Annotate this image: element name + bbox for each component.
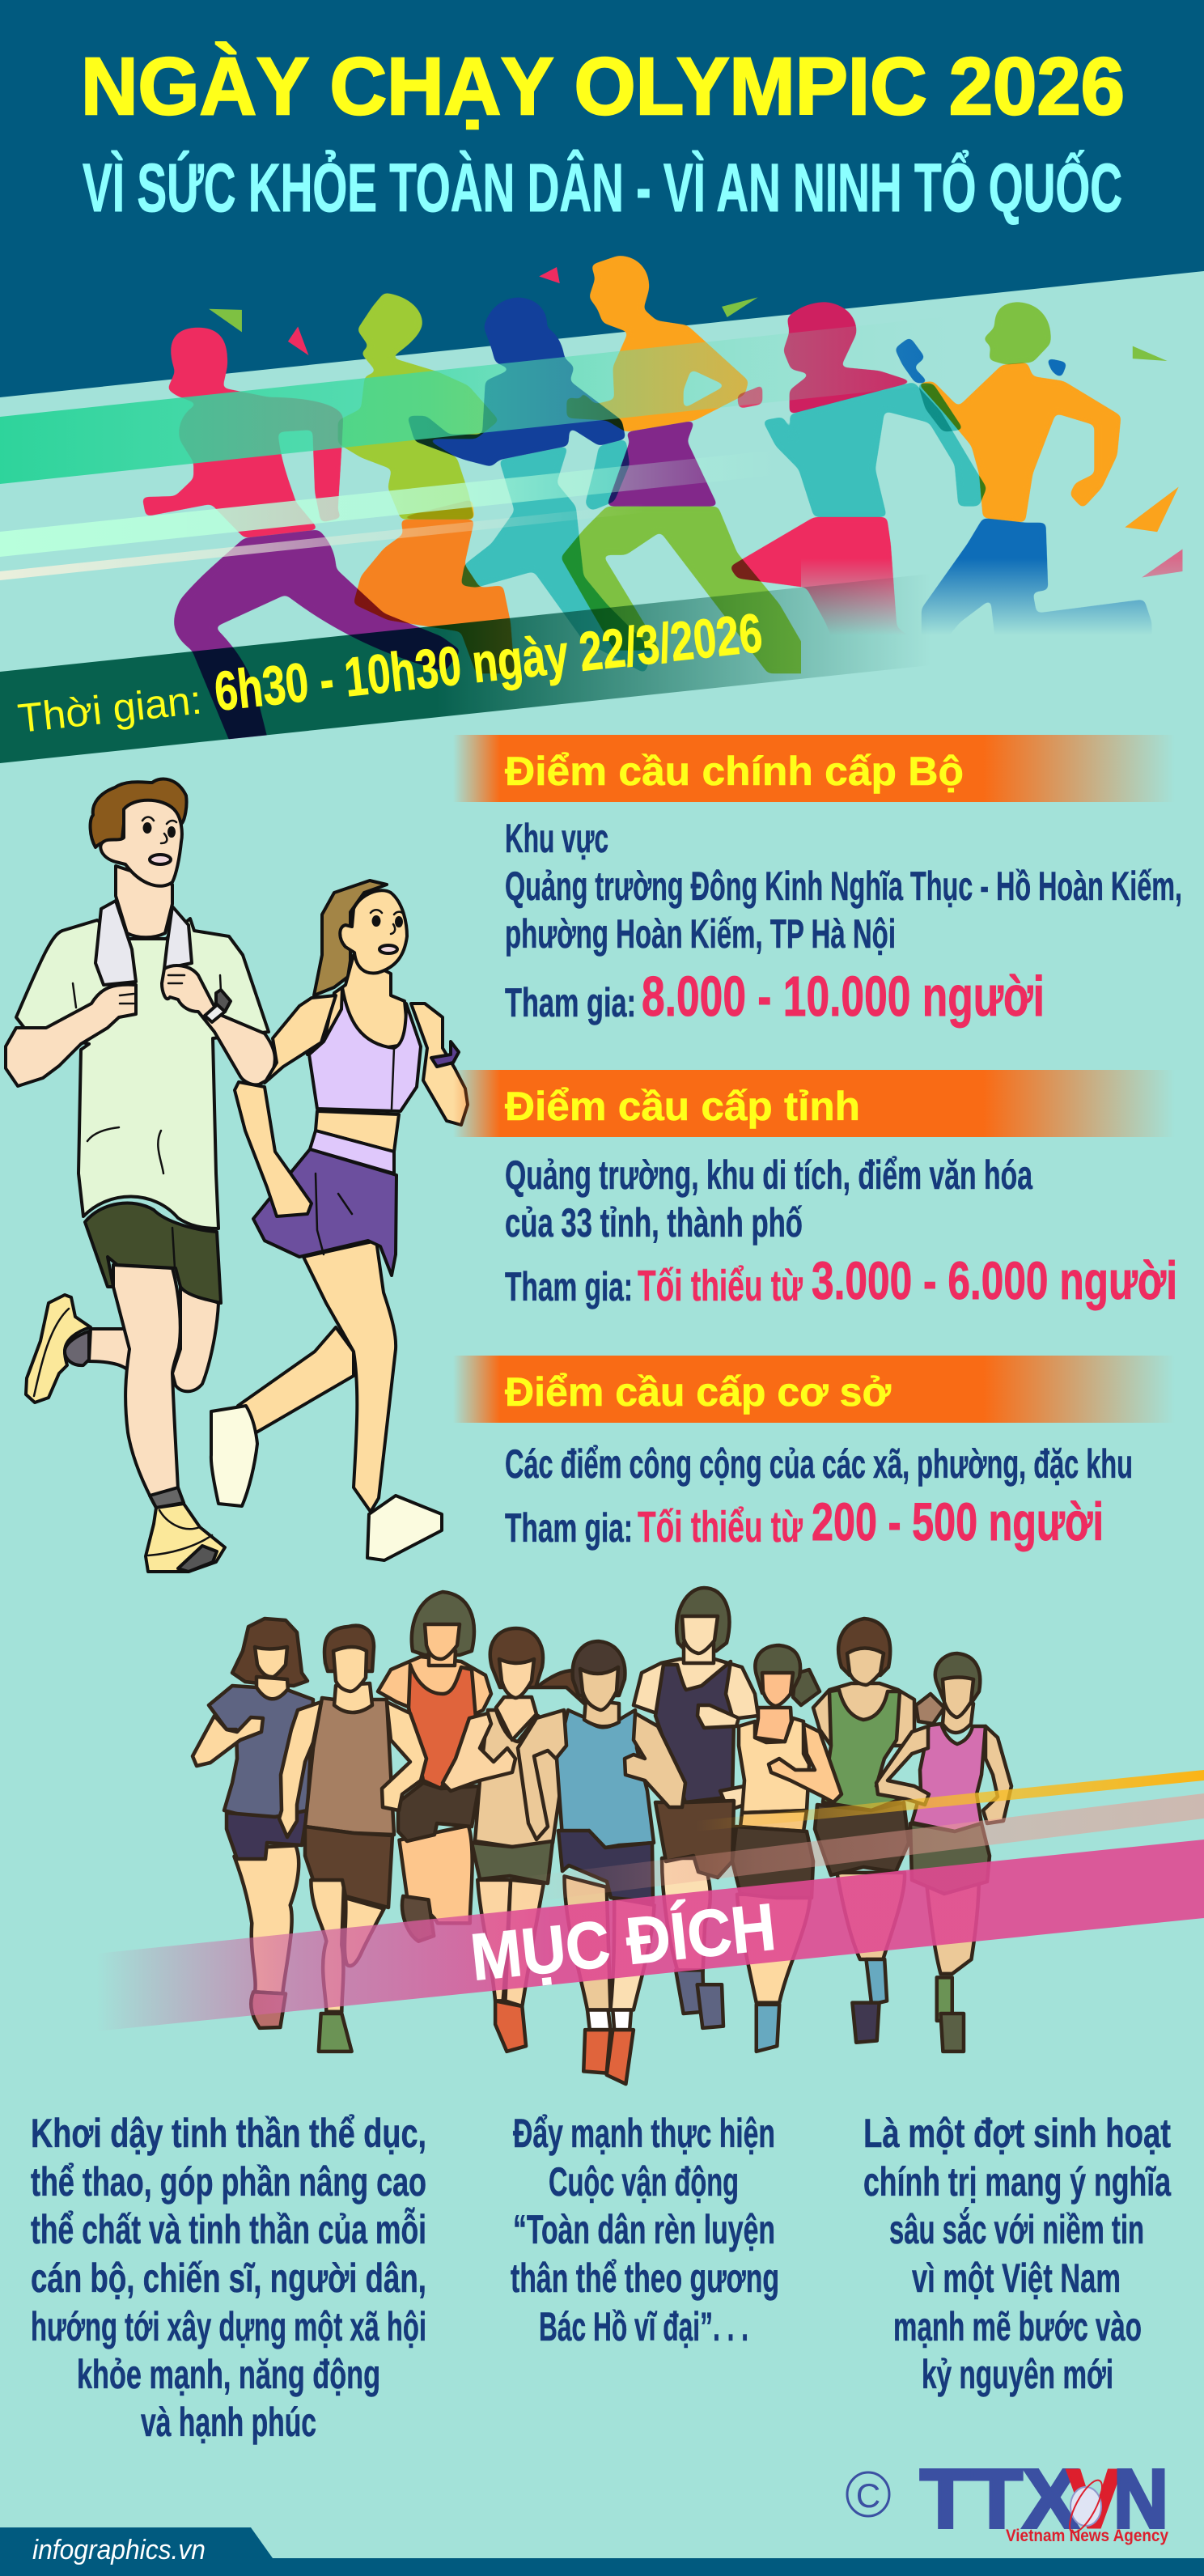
purpose ribbon	[96, 1840, 1204, 2031]
footer site name: infographics.vn	[32, 2535, 206, 2565]
participants: Tham gia:	[505, 1264, 633, 1309]
logo: TTXVN: N	[1113, 2452, 1168, 2545]
purpose column 1: cán bộ, chiến sĩ, người dân,	[31, 2256, 426, 2301]
runner: green tank	[813, 1619, 914, 2043]
heading bar	[453, 1070, 1175, 1137]
location text: của 33 tỉnh, thành phố	[505, 1200, 803, 1246]
participants: Tối thiểu từ	[638, 1262, 803, 1310]
participants: 8.000 - 10.000 người	[642, 965, 1045, 1028]
runner: centre blue tank	[518, 1641, 685, 2084]
speed stripes	[0, 316, 955, 580]
footer bar	[0, 2527, 1204, 2576]
header dark panel	[0, 0, 1204, 397]
fade of runner legs	[801, 558, 1204, 676]
runner: woman purple shirt	[193, 1619, 313, 2028]
purpose column 3	[863, 2111, 1172, 2397]
participants	[505, 1250, 1177, 1310]
heading bar	[453, 735, 1175, 802]
purpose stripes	[518, 1770, 1204, 1903]
runner: orange tank	[378, 1592, 491, 1942]
purpose column 1: thể chất và tinh thần của mỗi	[31, 2207, 426, 2252]
illustration: jogging couple	[6, 779, 468, 1572]
runner: brown tank	[279, 1626, 426, 2052]
location text	[505, 1152, 1033, 1246]
runner: woman pale top	[443, 1628, 584, 2052]
runner: navy tank	[634, 1588, 758, 2028]
heading: Điểm cầu cấp tỉnh	[505, 1084, 860, 1129]
panel: main bridge point	[453, 735, 1182, 1028]
time text: 6h30 - 10h30 ngày 22/3/2026	[211, 602, 765, 723]
logo: TTXVN: Vietnam News Agency	[1006, 2527, 1168, 2545]
purpose column 1: hướng tới xây dựng một xã hội	[31, 2304, 426, 2349]
decorative confetti triangles	[209, 267, 1182, 577]
participants: Tối thiểu từ	[638, 1503, 803, 1551]
heading: Điểm cầu chính cấp Bộ	[505, 749, 964, 794]
heading: Điểm cầu cấp cơ sở	[505, 1369, 891, 1415]
participants	[505, 965, 1045, 1028]
purpose column 2: Bác Hồ vĩ đại”. . .	[539, 2304, 748, 2349]
purpose column 3: kỷ nguyên mới	[922, 2352, 1113, 2397]
location text: Khu vực	[505, 816, 608, 861]
location text	[505, 816, 1182, 957]
man	[6, 779, 275, 1572]
location text: phường Hoàn Kiếm, TP Hà Nội	[505, 911, 896, 957]
time ribbon	[0, 573, 939, 763]
purpose column 1	[31, 2111, 426, 2445]
purpose column 1: khỏe mạnh, năng động	[77, 2352, 380, 2397]
time text: Thời gian:	[15, 677, 204, 741]
illustration: group of nine runners	[193, 1588, 1011, 2084]
logo: TTXVN: TTX	[920, 2452, 1079, 2545]
copyright mark: C	[856, 2476, 880, 2514]
logo: TTXVN	[920, 2452, 1168, 2545]
panel: provincial bridge point	[453, 1070, 1177, 1310]
runner: woman pink top	[876, 1653, 1011, 2052]
purpose column 1: thể thao, góp phần nâng cao	[31, 2159, 426, 2205]
purpose column 2: thân thể theo gương	[511, 2256, 779, 2301]
participants: Tham gia:	[505, 1505, 633, 1551]
purpose column 2	[511, 2111, 779, 2349]
panel: grassroots bridge point	[453, 1356, 1175, 1551]
participants: 200 - 500 người	[812, 1492, 1104, 1551]
purpose column 2: “Toàn dân rèn luyện	[513, 2207, 775, 2252]
title: NGÀY CHẠY OLYMPIC 2026	[81, 41, 1125, 132]
illustration: six colourful running silhouettes	[142, 256, 1152, 743]
copyright mark	[847, 2472, 889, 2516]
participants: Tham gia:	[505, 980, 636, 1025]
purpose column 2: Cuộc vận động	[549, 2159, 739, 2205]
purpose column 2: Đẩy mạnh thực hiện	[513, 2111, 775, 2156]
woman	[211, 881, 468, 1560]
runner: woman pale top right	[732, 1645, 842, 2052]
participants	[505, 1492, 1104, 1551]
heading bar	[453, 1356, 1175, 1423]
purpose column 1: Khơi dậy tinh thần thể dục,	[31, 2111, 426, 2156]
logo: TTXVN: V	[1066, 2452, 1121, 2545]
time text	[15, 602, 765, 741]
purpose heading: MỤC ĐÍCH	[467, 1891, 779, 1995]
purpose column 1: và hạnh phúc	[141, 2400, 316, 2445]
